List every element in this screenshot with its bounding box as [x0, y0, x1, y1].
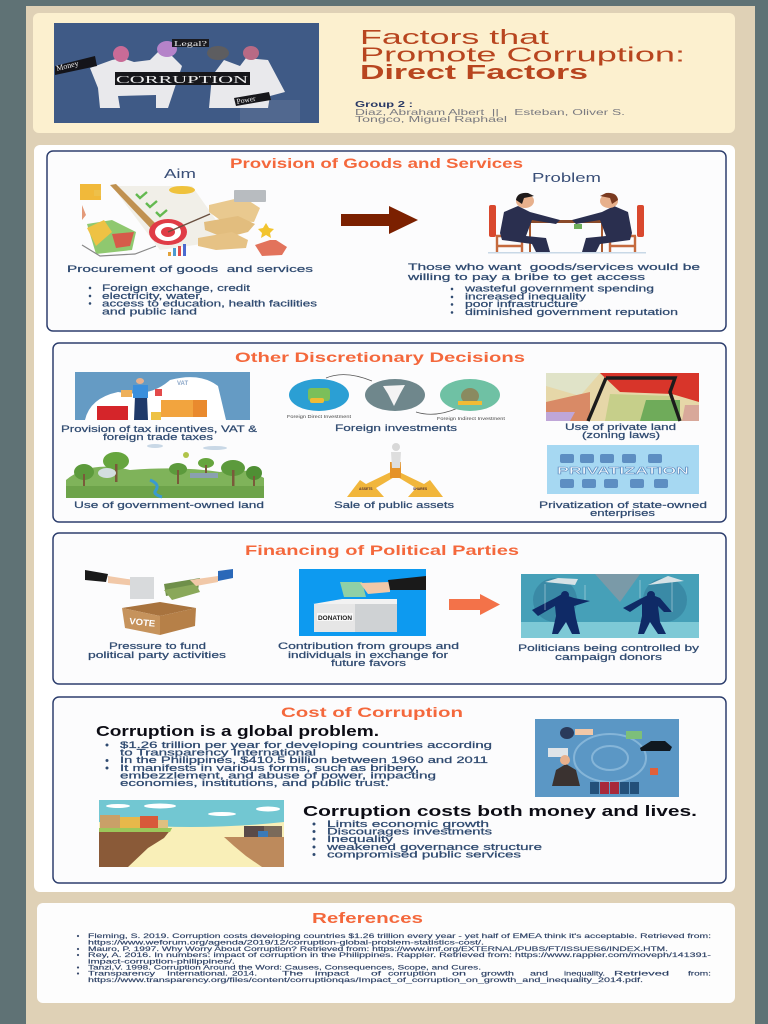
aim label: Aim [164, 167, 196, 181]
global problem bullet list: economies, institutions, and public trust. [120, 778, 389, 789]
panel: provision of goods and services [47, 151, 726, 331]
money and lives bullet list: Discourages investments [327, 826, 492, 838]
group members [355, 99, 625, 124]
global problem bullet list [106, 740, 492, 789]
reference list [77, 933, 711, 984]
heading: Cost of Corruption [281, 704, 463, 720]
reference list: Mauro, P. 1997. Why Worry About Corruption? Retrieved from: https://www.imf.org/EXTERNAL/PUBS/FT/ISSUES6/INDEX.HTM. [88, 946, 668, 953]
header image: corruption collage: Money [55, 59, 79, 73]
financing captions: individuals in exchange for [288, 650, 448, 660]
header image: corruption collage: Power [236, 94, 257, 106]
image: politicians as puppets [521, 574, 699, 638]
label group: land, assets and privatization: Sale of public assets [334, 500, 455, 510]
label group: land, assets and privatization [74, 500, 707, 518]
icon: two men bribing at a table [488, 193, 646, 254]
aim description and list: Foreign exchange, credit [102, 283, 251, 293]
problem description and list: diminished government reputation [465, 307, 678, 317]
image: government-owned land [66, 444, 264, 498]
image: corruption collage [535, 719, 679, 797]
title: Promote Corruption: [360, 44, 685, 66]
financing captions: Pressure to fund [109, 641, 206, 651]
panel: other discretionary decisions [53, 343, 726, 522]
image: foreign investment diagram: Foreign Indirect Investment [437, 416, 506, 421]
label group: tax, investment and zoning: foreign trade taxes [103, 432, 214, 442]
reference list: on [452, 970, 467, 978]
money and lives bullet list [313, 819, 542, 860]
reference list: Retrieved [614, 970, 670, 978]
reference list: inequality. [564, 970, 605, 978]
label group: land, assets and privatization: Use of government-owned land [74, 500, 264, 510]
global problem bullet list: It manifests in various forms, such as bribery, [120, 763, 419, 774]
reference list: International. [167, 970, 228, 978]
image: privatization: PRIVATIZATION [557, 466, 689, 477]
icon: procurement illustration [80, 184, 287, 256]
reference list: corruption [388, 970, 437, 978]
money and lives bullet list: weakened governance structure [325, 842, 542, 853]
reference list: https://www.weforum.org/agenda/2019/12/corruption-global-problem-statistics-cost/. [88, 940, 484, 946]
money and lives bullet list: Limits economic growth [327, 819, 489, 830]
image: privatization [547, 445, 699, 494]
arrow [449, 594, 500, 615]
global problem bullet list: $1.26 trillion per year for developing countries according [120, 740, 492, 751]
reference list: Fleming, S. 2019. Corruption costs developing countries $1.26 trillion every year - yet half of EMEA think it's acceptable. Retrieved from: [88, 933, 711, 940]
reference list: of [371, 970, 381, 978]
header image: corruption collage [54, 23, 319, 123]
subheading: money and lives: Corruption costs both money and lives. [303, 803, 697, 820]
money and lives bullet list: Inequality [327, 834, 393, 845]
image: donation box: DONATION [318, 616, 352, 622]
global problem bullet list: In the Philippines, $410.5 billion between 1960 and 2011 [120, 755, 488, 766]
image: foreign investment diagram [287, 375, 506, 421]
reference list: https://www.transparency.org/files/content/corruptionqas/Impact_of_corruption_on_growth_and_inequality_2014.pdf. [88, 977, 643, 984]
reference list: growth [481, 970, 515, 978]
financing captions: campaign donors [555, 652, 663, 662]
financing captions: political party activities [88, 650, 227, 660]
heading: Provision of Goods and Services [230, 155, 523, 171]
aim description and list: Procurement of goods and services [67, 264, 314, 274]
group members: Tongco, Miguel Raphael [355, 114, 507, 124]
image: foreign investment diagram: Foreign Direct Investment [287, 414, 352, 419]
title [360, 27, 685, 84]
header image: corruption collage: CORRUPTION [116, 74, 248, 86]
heading: Other Discretionary Decisions [235, 349, 525, 365]
label group: tax, investment and zoning: Foreign investments [335, 423, 458, 433]
label group: tax, investment and zoning: Use of private land [565, 422, 676, 432]
image: assets and shares arrows [347, 443, 443, 497]
aim description and list [67, 264, 318, 316]
financing captions: future favors [331, 658, 407, 668]
label group: tax, investment and zoning [61, 422, 676, 442]
header image: corruption collage: Legal? [174, 39, 208, 48]
label group: tax, investment and zoning: Provision of tax incentives, VAT & [61, 424, 257, 434]
financing captions: Politicians being controlled by [518, 643, 700, 653]
global problem bullet list: embezzlement, and abuse of power, impacting [120, 770, 436, 782]
image: assets and shares arrows: SHARES [413, 487, 428, 491]
image: donation box [299, 569, 426, 636]
problem description and list: willing to pay a bribe to get access [406, 272, 646, 282]
financing captions [88, 641, 700, 668]
problem label: Problem [532, 171, 601, 185]
image: tax incentives: VAT [177, 381, 188, 387]
reference list: and [530, 970, 549, 978]
reference list: Rey, A. 2016. In numbers: impact of corruption in the Philippines. Rappler. Retrieved from: https://www.rappler.com/moveph/141391- [88, 952, 711, 959]
reference list: Tanzi,V. 1998. Corruption Around the Word: Causes, Consequences, Scope, and Cures. [88, 964, 481, 972]
image: cliffs between rich and poor [99, 800, 284, 867]
title: Direct Factors [360, 62, 588, 84]
label group: land, assets and privatization: enterprises [590, 508, 656, 518]
global problem bullet list: to Transparency International [120, 748, 316, 759]
problem description and list: increased inequality [465, 292, 587, 302]
panel: financing of political parties [53, 533, 726, 684]
panel: cost of corruption [53, 697, 726, 883]
image: vote box and money hands [85, 569, 233, 635]
heading: References [312, 910, 423, 927]
subheading: global problem: Corruption is a global problem. [96, 723, 379, 740]
aim description and list: electricity, water, [102, 291, 203, 301]
image: tax incentives [75, 372, 250, 420]
group members: Diaz, Abraham Albert || Esteban, Oliver S. [355, 107, 625, 117]
financing captions: Contribution from groups and [278, 641, 459, 651]
header panel [33, 13, 735, 133]
heading: Financing of Political Parties [245, 542, 519, 558]
aim description and list: access to education, health facilities [102, 298, 318, 308]
label group: land, assets and privatization: Privatization of state-owned [539, 500, 707, 510]
aim description and list: and public land [102, 306, 197, 316]
image: vote box and money hands: VOTE [129, 616, 156, 629]
problem description and list: wasteful government spending [463, 284, 654, 294]
panel: references [37, 903, 735, 1003]
image: zoning map [546, 373, 699, 421]
problem description and list: Those who want goods/services would be [408, 262, 700, 272]
label group: tax, investment and zoning: (zoning laws) [582, 430, 660, 440]
image: assets and shares arrows: ASSETS [359, 487, 373, 491]
reference list: The [282, 970, 304, 978]
title: Factors that [360, 27, 550, 49]
arrow [341, 206, 418, 234]
reference list: impact-corruption-philippines/. [88, 958, 235, 966]
money and lives bullet list: compromised public services [327, 850, 521, 860]
group members: Group 2 : [355, 99, 413, 109]
reference list: from: [688, 970, 711, 978]
problem description and list [406, 262, 700, 317]
problem description and list: poor infrastructure [465, 299, 578, 309]
reference list: 2014. [232, 970, 257, 978]
reference list: impact [315, 970, 349, 978]
reference list: Transparency [88, 970, 156, 978]
